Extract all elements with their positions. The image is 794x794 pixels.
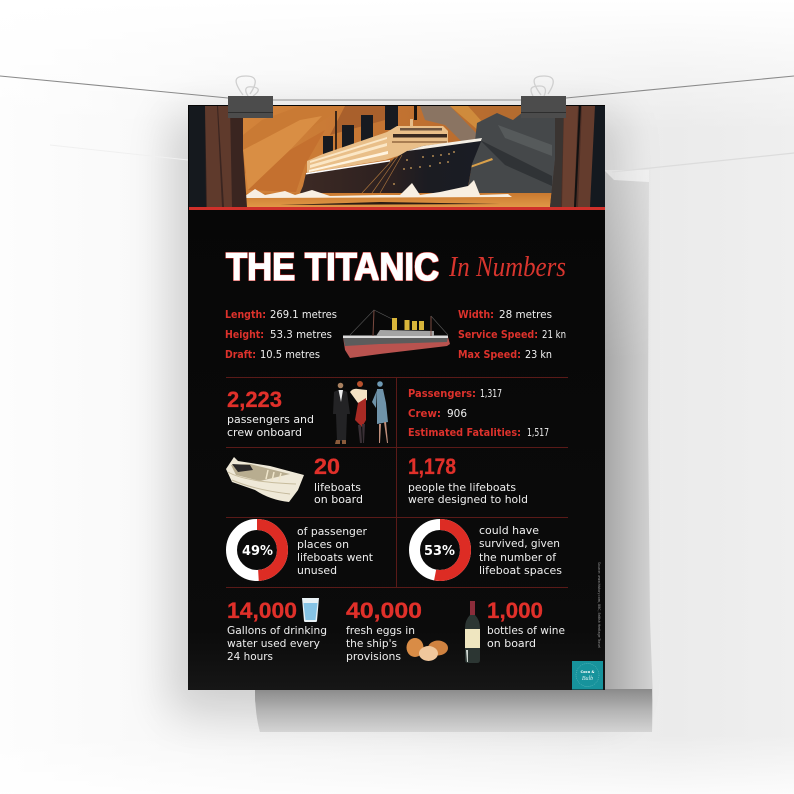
text: 49% caption: lifeboats went <box>297 551 373 564</box>
poster <box>188 105 605 690</box>
stat: 40,000 eggs: 40,000 <box>346 598 422 623</box>
specifications left: 10.5 metres <box>260 349 320 361</box>
donut chart: 49% <box>232 524 282 576</box>
right curtain <box>550 106 605 207</box>
stat: 40,000 eggs: the ship's <box>346 637 397 650</box>
stat: 20 lifeboats: 20 <box>314 454 340 479</box>
distant mountain <box>420 106 478 150</box>
text: 49% caption: places on <box>297 538 349 551</box>
specifications right: 23 kn <box>525 349 552 361</box>
stat: 2,223 passengers and crew: passengers and <box>227 413 314 426</box>
stat: 20 lifeboats: on board <box>314 493 363 506</box>
left curtain <box>189 106 247 207</box>
text: 53% caption: survived, given <box>479 537 560 550</box>
hull <box>300 139 482 193</box>
donut chart: 53%: 53% <box>424 543 455 559</box>
specifications left: Draft: <box>225 349 256 361</box>
stat: 2,223 passengers and crew: crew onboard <box>227 426 302 439</box>
stat: 14,000 gallons: Gallons of drinking <box>227 624 327 637</box>
stat: passengers, crew, fatalities: 906 <box>447 408 467 420</box>
stat: passengers, crew, fatalities: Estimated Fatalities: <box>408 427 521 439</box>
logo badge <box>572 661 603 690</box>
icon: 1920s passengers <box>333 381 388 444</box>
stat: passengers, crew, fatalities <box>408 388 549 439</box>
dark rock iceberg <box>467 112 556 196</box>
specifications left: 269.1 metres <box>270 309 337 321</box>
stat: 20 lifeboats: lifeboats <box>314 481 361 494</box>
text: 53% caption: lifeboat spaces <box>479 564 562 577</box>
binder clip left <box>228 76 273 118</box>
stat: 1,178 people <box>408 454 528 506</box>
specifications right: 21 kn <box>542 329 566 341</box>
stat: 20 lifeboats <box>314 454 363 506</box>
source note: Source: www.history.com, BBC, British Heritage Travel <box>597 562 601 648</box>
specifications left <box>225 309 337 361</box>
stat: 1,178 people: 1,178 <box>408 454 456 479</box>
stat: 1,000 bottles of wine: on board <box>487 637 536 650</box>
stat: 1,000 bottles of wine: 1,000 <box>487 598 543 623</box>
hanging wire <box>0 76 794 100</box>
stat: 14,000 gallons: 14,000 <box>227 598 297 623</box>
banner illustration <box>189 106 605 208</box>
specifications right <box>458 309 566 361</box>
donut chart: 53% <box>414 524 466 576</box>
text: 53% caption: the number of <box>479 551 556 564</box>
specifications left: Length: <box>225 309 266 321</box>
icon: glass of water <box>302 598 319 622</box>
stat: 1,178 people: were designed to hold <box>408 493 528 506</box>
poster shadow <box>50 145 794 732</box>
specifications left: Height: <box>225 329 264 341</box>
stat: 14,000 gallons: 24 hours <box>227 650 273 663</box>
specifications right: Max Speed: <box>458 349 521 361</box>
stat: 1,000 bottles of wine <box>487 598 565 650</box>
title: THE TITANIC <box>226 246 439 289</box>
portholes <box>393 151 455 185</box>
stat: passengers, crew, fatalities: 1,317 <box>480 388 502 400</box>
specifications left: 53.3 metres <box>270 329 332 341</box>
text: 49% caption: unused <box>297 564 337 577</box>
logo badge: Bulb <box>582 676 593 682</box>
stat: 2,223 passengers and crew: 2,223 <box>227 387 282 412</box>
icon: ship side view <box>343 310 450 358</box>
title: In Numbers <box>448 251 566 283</box>
specifications right: Service Speed: <box>458 329 538 341</box>
binder clip right <box>521 76 566 118</box>
stat: 1,178 people: people the lifeboats <box>408 481 516 494</box>
red banner rule <box>189 207 605 210</box>
text: 53% caption <box>479 524 562 577</box>
title <box>226 246 566 289</box>
stat: 1,000 bottles of wine: bottles of wine <box>487 624 565 637</box>
specifications right: Width: <box>458 309 494 321</box>
donut chart: 49%: 49% <box>242 543 273 559</box>
icon: lifeboat <box>226 457 304 502</box>
water <box>243 193 555 208</box>
stat: passengers, crew, fatalities: Passengers: <box>408 388 476 400</box>
stat: 40,000 eggs: provisions <box>346 650 401 663</box>
stat: passengers, crew, fatalities: Crew: <box>408 408 441 420</box>
funnels and masts <box>323 136 333 156</box>
icon: wine bottle <box>465 601 480 663</box>
stat: 40,000 eggs <box>346 598 422 663</box>
stat: 14,000 gallons: water used every <box>227 637 320 650</box>
stat: 40,000 eggs: fresh eggs in <box>346 624 415 637</box>
text: 49% caption <box>297 525 373 577</box>
logo badge: Coco & <box>580 670 595 674</box>
superstructure <box>307 126 448 173</box>
icon: eggs <box>406 638 448 661</box>
stat: 14,000 gallons <box>227 598 327 663</box>
text: 53% caption: could have <box>479 524 539 537</box>
stat: passengers, crew, fatalities: 1,517 <box>527 427 549 439</box>
foam <box>245 180 512 198</box>
specifications right: 28 metres <box>499 309 552 321</box>
text: 49% caption: of passenger <box>297 525 368 538</box>
stat: 2,223 passengers and crew <box>227 387 314 439</box>
